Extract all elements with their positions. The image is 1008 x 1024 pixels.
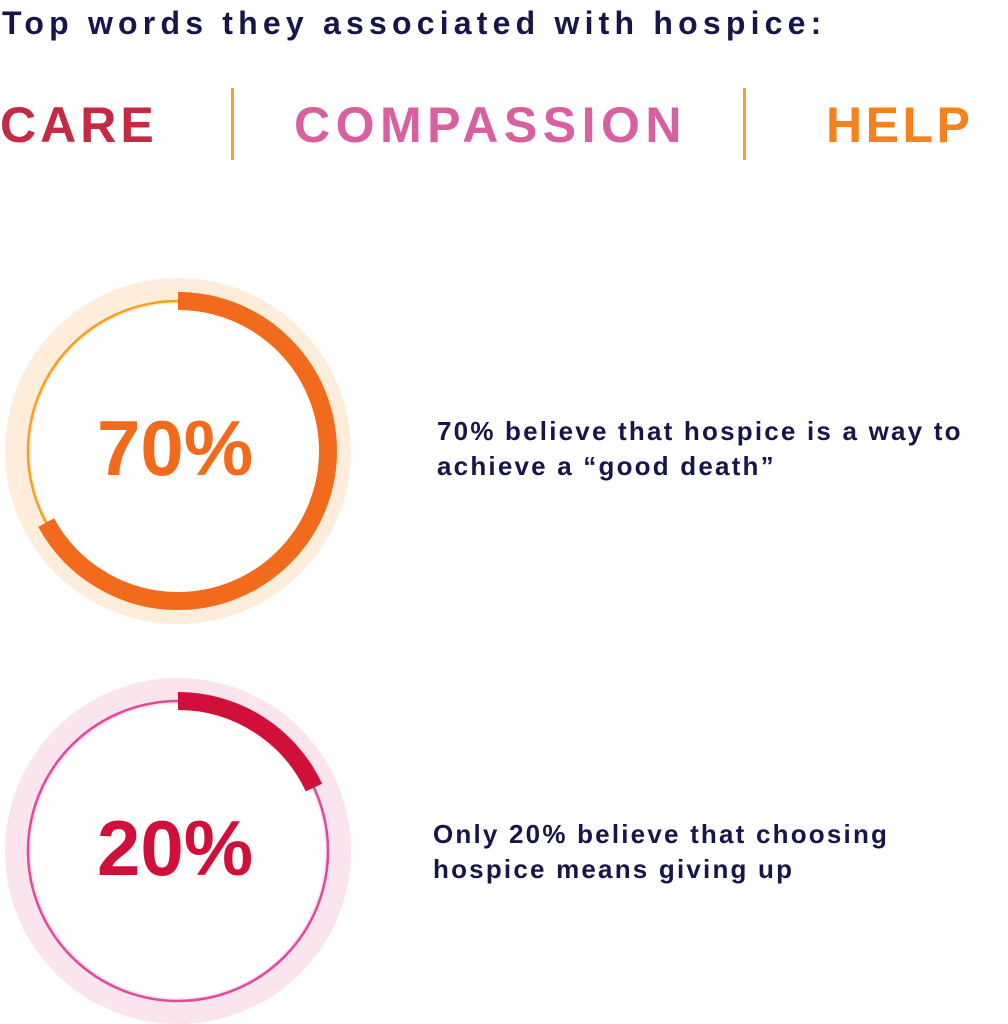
text: 70% statement [437,416,963,481]
chart: 20% ring: 20% [97,804,253,892]
text: 20% statement: Only 20% believe that choosing [433,819,889,849]
word: compassion: COMPASSION [294,97,687,153]
word: care: CARE [0,97,158,153]
text: 20% statement [433,819,889,884]
chart: 20% ring [5,678,351,1024]
chart: 70% ring: 70% [97,404,253,492]
text: 20% statement: hospice means giving up [433,854,794,884]
divider 1 [231,88,234,160]
chart: 70% ring [5,278,351,624]
text: 70% statement: 70% believe that hospice is a way to [437,416,963,446]
title: Top words they associated with hospice: [2,5,827,41]
divider 2 [743,88,746,160]
word: help: HELP [826,97,973,153]
text: 70% statement: achieve a “good death” [437,451,776,481]
